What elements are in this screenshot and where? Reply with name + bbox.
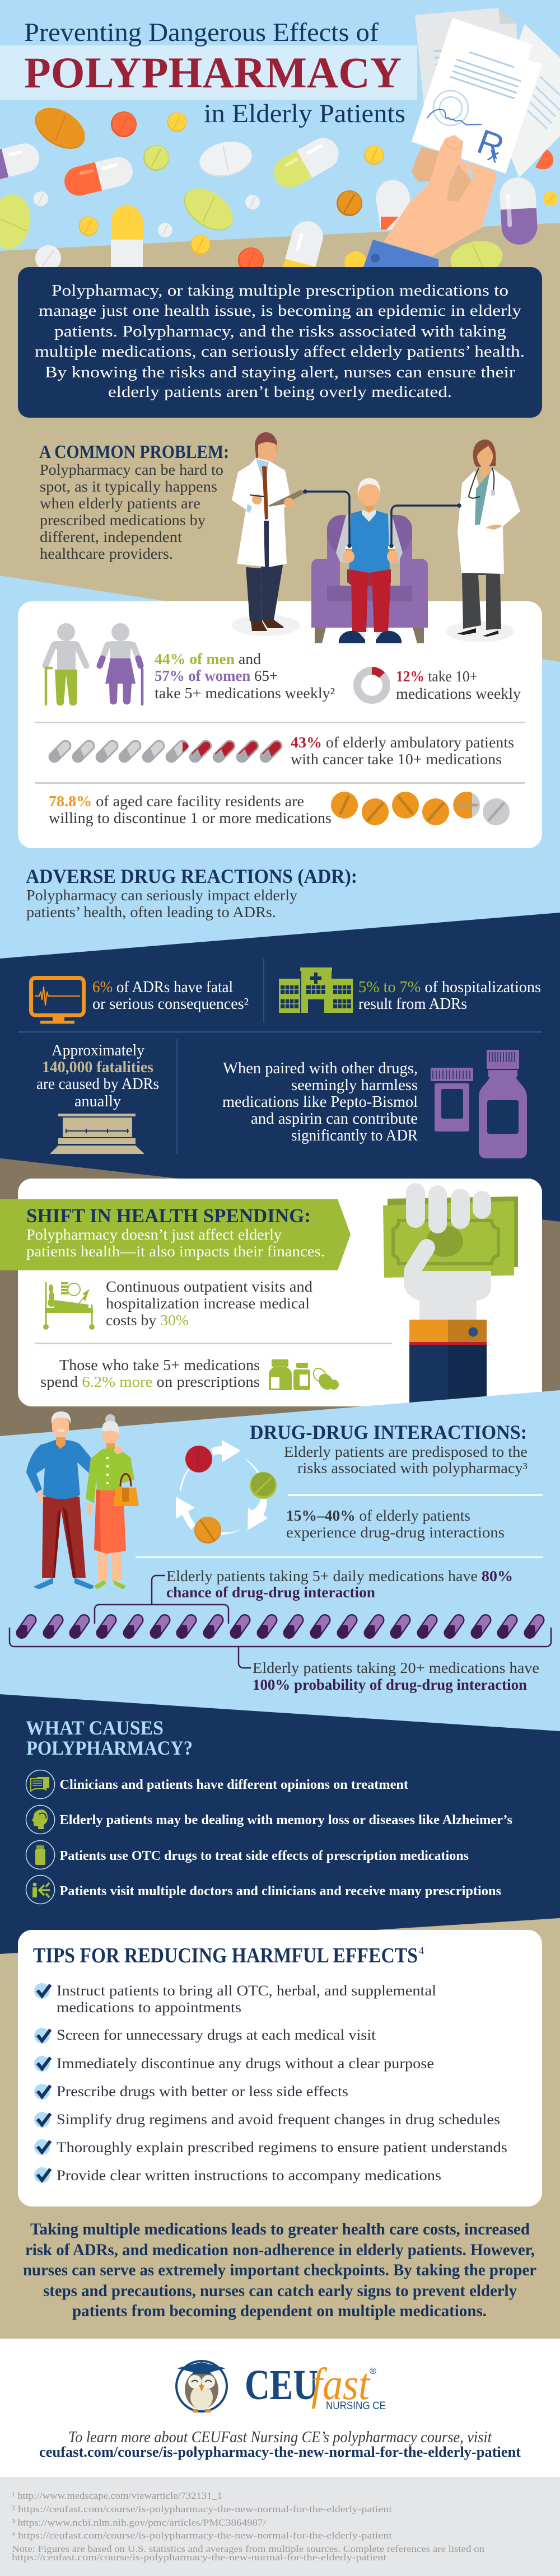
stat: hospitalizations: result from ADRs [358, 995, 467, 1013]
icon: medicine bottles [431, 1050, 527, 1158]
heading: adverse drug reactions: Polypharmacy can seriously impact elderly [26, 887, 298, 904]
text: harmless medications: significantly to ADR [291, 1126, 418, 1144]
illustration: chair [311, 515, 428, 643]
stat: 80 percent [166, 1568, 513, 1601]
conclusion text: Taking multiple medications leads to greater health care costs, increased [30, 2220, 530, 2238]
stat: 43 percent: 43% of elderly ambulatory patients [291, 734, 514, 751]
icon: head and brain [26, 1805, 55, 1834]
stat: 12 percent: 12% take 10+ [396, 668, 478, 685]
heading: adverse drug reactions: ADVERSE DRUG REACTIONS (ADR): [26, 865, 357, 887]
title [24, 18, 405, 128]
hero illustration: prescription papers and hand: R [472, 122, 509, 167]
hero illustration: scattered pills [0, 99, 558, 293]
stat: hospitalizations [358, 978, 541, 1013]
stat: fatalities: Approximately [52, 1041, 144, 1059]
tip 3: Immediately discontinue any drugs without a clear purpose [57, 2055, 434, 2072]
icon: speech bubbles [26, 1770, 55, 1798]
conclusion text [23, 2220, 536, 2320]
heading banner: patients health—it also impacts their finances. [26, 1243, 325, 1260]
call to action: To learn more about CEUFast Nursing CE’s polypharmacy course, visit [68, 2428, 492, 2446]
illustration: elderly woman [86, 1414, 139, 1589]
icon: interaction cycle [176, 1440, 277, 1544]
stat: medical costs: Continuous outpatient visits and [106, 1278, 313, 1295]
hero illustration: prescription papers and hand [363, 8, 560, 267]
heading: drug-drug interactions: DRUG-DRUG INTERACTIONS: [250, 1421, 527, 1443]
panel: introduction: By knowing the risks and staying alert, nurses can ensure their [45, 363, 515, 381]
logo: wordmark: NURSING CE [326, 2400, 386, 2412]
stat: 100 percent: 100% probability of drug-drug interaction [253, 1676, 527, 1693]
stat: fatalities: 140,000 fatalities [42, 1058, 153, 1076]
stat: 6 percent: or serious consequences² [92, 995, 249, 1013]
bracket: twenty medications [10, 1628, 551, 1668]
icon: hand holding money [383, 1183, 518, 1406]
stat: 80 percent: Elderly patients taking 5+ daily medications have 80% [166, 1568, 513, 1584]
stat: 43 percent: with cancer take 10+ medications [291, 751, 502, 768]
background: tan table [0, 223, 560, 662]
icon row: capsules 43 percent [46, 737, 285, 765]
title band [0, 45, 417, 100]
heading [26, 1717, 193, 1759]
stat: hospitalizations: 5% to 7% of hospitalizations [358, 978, 541, 996]
tip 5: Simplify drug regimens and avoid frequent changes in drug schedules [57, 2111, 500, 2128]
panel: references [0, 2477, 560, 2576]
stat: 15 to 40 percent: 15%–40% of elderly patients [286, 1507, 470, 1524]
heading: a common problem: healthcare providers. [40, 545, 173, 562]
illustration: female doctor [457, 440, 520, 637]
connector lines [304, 490, 460, 547]
stat: 6 percent [92, 978, 249, 1013]
title: in Elderly Patients [204, 99, 405, 128]
stat: men and women [155, 651, 335, 702]
icon: pill bottle [26, 1841, 55, 1869]
panel: tips for reducing harmful effects [18, 1930, 542, 2206]
heading: WHAT CAUSES [26, 1717, 164, 1739]
stat: men and women: 57% of women 65+ [155, 667, 278, 684]
text: harmless medications: seemingly harmless [291, 1076, 418, 1094]
heading banner: Polypharmacy doesn’t just affect elderly [26, 1226, 282, 1243]
heading: POLYPHARMACY? [26, 1737, 193, 1759]
icon: casket [50, 1114, 144, 1154]
heading: a common problem: different, independent [40, 529, 183, 545]
heading: adverse drug reactions: patients’ health, often leading to ADRs. [26, 904, 276, 920]
background: sky blue [0, 0, 560, 1008]
stat: medical costs [106, 1278, 313, 1329]
panel: shift in health spending [0, 1179, 542, 1406]
logo: wordmark [245, 2360, 386, 2412]
heading: adverse drug reactions [26, 865, 357, 920]
call to action [39, 2428, 521, 2460]
heading: a common problem: A COMMON PROBLEM: [39, 442, 229, 462]
panel: introduction: multiple medications, can seriously affect elderly patients’ health. [35, 343, 525, 361]
conclusion text: patients from becoming dependent on multiple medications. [72, 2302, 487, 2320]
stat: men and women: 44% of men and [155, 651, 262, 667]
icon: hospital [279, 967, 353, 1013]
tip 2: Screen for unnecessary drugs at each medical visit [57, 2027, 376, 2043]
heading: a common problem [39, 442, 229, 562]
tip 6: Thoroughly explain prescribed regimens to ensure patient understands [57, 2139, 507, 2156]
stat: fatalities: are caused by ADRs [36, 1075, 159, 1093]
background: brown band [0, 1158, 560, 1467]
bracket: five medications [95, 1575, 228, 1624]
text: harmless medications: and aspirin can contribute [251, 1110, 418, 1128]
panel: references: https://ceufast.com/course/is-polypharmacy-the-new-normal-for-the-elderly-patient [18, 2530, 392, 2541]
call to action: ceufast.com/course/is-polypharmacy-the-new-normal-for-the-elderly-patient [39, 2444, 521, 2460]
title: Preventing Dangerous Effects of [24, 18, 379, 47]
stat: 100 percent [253, 1659, 539, 1693]
title: POLYPHARMACY [24, 48, 402, 97]
panel: introduction: Polypharmacy, or taking multiple prescription medications to [52, 282, 508, 300]
stat: 80 percent: chance of drug-drug interaction [166, 1584, 375, 1601]
stat: men and women: take 5+ medications weekly² [155, 685, 335, 702]
icon: prescription bottles [269, 1359, 339, 1392]
illustration: seated patient [336, 478, 403, 643]
panel: adverse drug reaction facts [0, 913, 560, 1222]
heading: TIPS FOR REDUCING HARMFUL EFFECTS [33, 1944, 418, 1967]
panel: logo and call to action [0, 2339, 560, 2477]
stat: 6 percent: 6% of ADRs have fatal [92, 978, 233, 996]
stat: 78.8 percent: 78.8% of aged care facility residents are [49, 793, 304, 810]
icon: person and diverging arrows [26, 1876, 55, 1904]
heading banner: SHIFT IN HEALTH SPENDING: [26, 1205, 311, 1227]
stat: medical costs: hospitalization increase medical [106, 1295, 310, 1312]
text: harmless medications: When paired with other drugs, [223, 1059, 418, 1077]
panel: introduction: elderly patients aren’t being overly medicated. [108, 383, 452, 401]
logo: wordmark: ® [370, 2367, 376, 2376]
conclusion text: steps and precautions, nurses can catch early signs to prevent elderly [43, 2282, 517, 2300]
stat: prescriptions: spend 6.2% more on prescriptions [40, 1373, 260, 1390]
heading: a common problem: when elderly patients are [40, 495, 200, 512]
panel: references: Note: Figures are based on U.S. statistics and averages from multiple sources. Complete references are listed on [12, 2544, 485, 2554]
logo: wordmark: CEU [245, 2362, 318, 2409]
tip 1 [34, 1983, 436, 2016]
panel: what causes polypharmacy [0, 1694, 560, 1954]
logo: wordmark: fast [311, 2360, 371, 2409]
tip 1: medications to appointments [57, 1999, 241, 2016]
stat: prescriptions: Those who take 5+ medications [59, 1357, 260, 1373]
icon: donut chart 12 percent [357, 671, 386, 700]
icon row: tablets 78.8 percent [331, 792, 510, 825]
text: harmless medications: medications like Pepto-Bismol [222, 1093, 418, 1111]
icon: elderly man [45, 623, 86, 705]
background: tan lower section [0, 1918, 560, 2339]
illustration: male doctor [232, 432, 306, 631]
tip 1: Instruct patients to bring all OTC, herbal, and supplemental [57, 1983, 436, 1999]
stat: prescriptions [40, 1357, 260, 1390]
conclusion text: risk of ADRs, and medication non-adherence in elderly patients. However, [25, 2241, 535, 2259]
stat: fatalities: anually [74, 1092, 121, 1110]
cause 4: Patients visit multiple doctors and clinicians and receive many prescriptions [59, 1884, 501, 1899]
icon: elderly woman [100, 623, 142, 704]
stat: 15 to 40 percent: experience drug-drug interactions [286, 1524, 505, 1541]
icon: hospital bed [43, 1282, 95, 1330]
panel: references: 4 [12, 2531, 15, 2537]
stat: fatalities [36, 1041, 159, 1110]
panel: common problem statistics [18, 432, 542, 848]
heading: drug-drug interactions: Elderly patients are predisposed to the [284, 1443, 528, 1460]
panel: references: ² https://ceufast.com/course/is-polypharmacy-the-new-normal-for-the-elderly-patient [12, 2504, 392, 2514]
stat: 78.8 percent [49, 793, 332, 826]
cause 1: Clinicians and patients have different opinions on treatment [59, 1778, 408, 1792]
hero illustration: prescription papers and hand: x [485, 142, 502, 167]
icon: heart monitor [31, 978, 84, 1023]
heading: drug-drug interactions: risks associated with polypharmacy³ [297, 1460, 528, 1476]
heading: a common problem: Polypharmacy can be hard to [40, 461, 223, 478]
panel: references: ³ https://www.ncbi.nlm.nih.gov/pmc/articles/PMC3864987/ [12, 2517, 266, 2528]
heading: drug-drug interactions [250, 1421, 528, 1476]
heading: a common problem: spot, as it typically happens [40, 478, 217, 495]
panel: introduction: patients. Polypharmacy, and the risks associated with taking [54, 322, 506, 340]
background: light blue drug interactions [0, 1390, 560, 1731]
cause 2: Elderly patients may be dealing with memory loss or diseases like Alzheimer’s [59, 1813, 512, 1827]
panel: introduction [18, 267, 542, 418]
text: harmless medications [222, 1059, 418, 1144]
heading banner [0, 1199, 351, 1270]
stat: 12 percent [396, 668, 521, 702]
floor shadows [232, 615, 514, 642]
heading: 4 [419, 1945, 424, 1956]
stat: medical costs: costs by 30% [106, 1312, 189, 1329]
panel: introduction: manage just one health issue, is becoming an epidemic in elderly [39, 302, 522, 320]
icon row: twenty capsules [13, 1612, 547, 1641]
heading: a common problem: prescribed medications by [40, 512, 206, 529]
stat: 12 percent: medications weekly [396, 685, 521, 702]
tip 4: Prescribe drugs with better or less side effects [57, 2083, 348, 2100]
stat: 15 to 40 percent [286, 1507, 505, 1541]
conclusion text: nurses can serve as extremely important checkpoints. By taking the proper [23, 2261, 536, 2279]
stat: 100 percent: Elderly patients taking 20+ medications have [253, 1659, 539, 1676]
stat: 43 percent [291, 734, 514, 768]
panel: references: https://ceufast.com/course/is-polypharmacy-the-new-normal-for-the-elderly-patient [12, 2552, 386, 2563]
tip 7: Provide clear written instructions to accompany medications [57, 2167, 441, 2184]
illustration: elderly man [26, 1411, 94, 1589]
logo: owl [176, 2361, 227, 2413]
panel: references: ¹ http://www.medscape.com/viewarticle/732131_1 [12, 2490, 222, 2501]
cause 3: Patients use OTC drugs to treat side effects of prescription medications [59, 1849, 469, 1863]
stat: 78.8 percent: willing to discontinue 1 or more medications [49, 810, 332, 826]
panel: drug-drug interactions [10, 1411, 551, 1693]
